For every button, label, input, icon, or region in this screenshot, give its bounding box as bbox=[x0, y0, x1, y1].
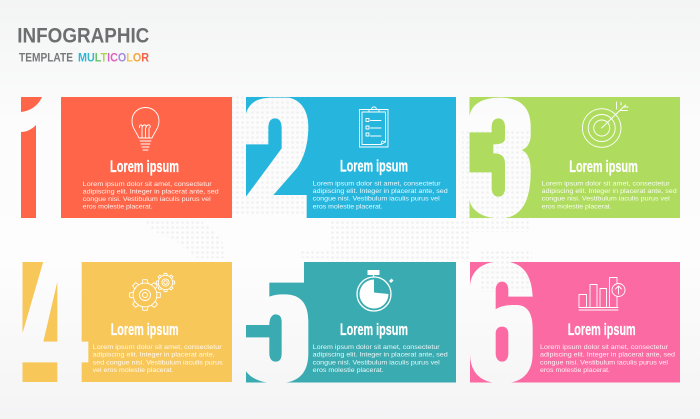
body text: Lorem ipsum dolor sit amet, consectetur bbox=[313, 344, 441, 351]
panel 3: target bbox=[470, 97, 680, 218]
heading: Lorem ipsum bbox=[111, 320, 179, 339]
panel 2: checklist bbox=[246, 97, 456, 218]
body text: sed congue nisl. Vestibulum iaculis purus bbox=[93, 359, 223, 366]
body text: adipiscing elit. Integer in placerat ante, sed bbox=[313, 188, 448, 195]
panel 2 background with numeral 2 bbox=[246, 97, 456, 218]
body text: eros molestie placerat. bbox=[313, 367, 384, 374]
body text: Lorem ipsum dolor sit amet, consectetur bbox=[313, 180, 442, 187]
body text: eros molestie placerat. bbox=[540, 367, 610, 374]
icon: gears bbox=[130, 273, 175, 310]
icon: bar chart with up arrow bbox=[579, 278, 625, 310]
body text: adipiscing elit. Integer in placerat ante, bbox=[93, 352, 215, 359]
title bbox=[17, 25, 150, 65]
title: INFOGRAPHIC bbox=[17, 25, 149, 48]
body text bbox=[542, 180, 677, 210]
panel 1 background with numeral 1 bbox=[21, 97, 232, 218]
heading: Lorem ipsum bbox=[568, 320, 636, 339]
body text: adipiscing elit. Integer in placerat ante, sed bbox=[542, 188, 677, 195]
body text: adipiscing elit. Integer in placerat ante, sed bbox=[540, 352, 675, 359]
panel 5 background with numeral 5 bbox=[246, 262, 456, 382]
panel 6 background with numeral 6 bbox=[470, 262, 680, 382]
body text: Lorem ipsum dolor sit amet, consectetur bbox=[542, 180, 671, 187]
body text: Lorem ipsum dolor sit amet, consectetur bbox=[93, 344, 223, 351]
body text: Lorem ipsum dolor sit amet, consectetur bbox=[83, 181, 213, 188]
panel 4: gears bbox=[22, 262, 232, 382]
panel 6: growth chart bbox=[470, 262, 680, 382]
body text: adipiscing elit. Integer in placerat ante, sed bbox=[313, 352, 448, 359]
heading: Lorem ipsum bbox=[569, 157, 638, 176]
icon: clipboard bbox=[360, 107, 388, 147]
subtitle: multicolor: MULTICOLOR bbox=[78, 53, 150, 65]
body text: congue nisi. Vestibulum iaculis purus vel bbox=[313, 196, 440, 203]
heading: Lorem ipsum bbox=[340, 320, 408, 339]
body text: congue nisi. Vestibulum iaculis purus vel bbox=[542, 196, 670, 203]
heading: Lorem ipsum bbox=[340, 157, 408, 176]
body text: congue nisl. Vestibulum iaculis purus vel bbox=[313, 359, 440, 366]
body text: congue nisi. Vestibulum iaculis purus vel bbox=[540, 359, 669, 366]
panel 1: idea bbox=[21, 97, 232, 218]
icon: stopwatch bbox=[357, 270, 394, 311]
body text bbox=[83, 181, 219, 210]
body text bbox=[313, 180, 448, 210]
heading: Lorem ipsum bbox=[110, 157, 179, 176]
body text: vel eros molestie placerat. bbox=[93, 367, 174, 374]
body text: adipiscing elit. Integer in placerat ante, sed bbox=[83, 188, 219, 196]
body text bbox=[313, 344, 448, 374]
icon: target with arrow bbox=[582, 102, 628, 147]
panel 5: stopwatch bbox=[246, 262, 456, 382]
panel 4 background with numeral 4 bbox=[22, 262, 232, 382]
body text: Lorem ipsum dolor sit amet, consectetur bbox=[540, 344, 669, 351]
subtitle: template: TEMPLATE bbox=[19, 53, 73, 65]
body text: eros molestie placerat. bbox=[83, 204, 153, 210]
body text: congue nisi. Vestibulum iaculis purus vel bbox=[83, 196, 211, 203]
body text bbox=[540, 344, 675, 374]
body text bbox=[93, 344, 223, 374]
body text: eros molestie placerat. bbox=[542, 203, 612, 210]
body text: eros molestie placerat. bbox=[313, 203, 383, 210]
icon: light bulb bbox=[132, 108, 159, 150]
panel 3 background with numeral 3 bbox=[470, 97, 680, 218]
